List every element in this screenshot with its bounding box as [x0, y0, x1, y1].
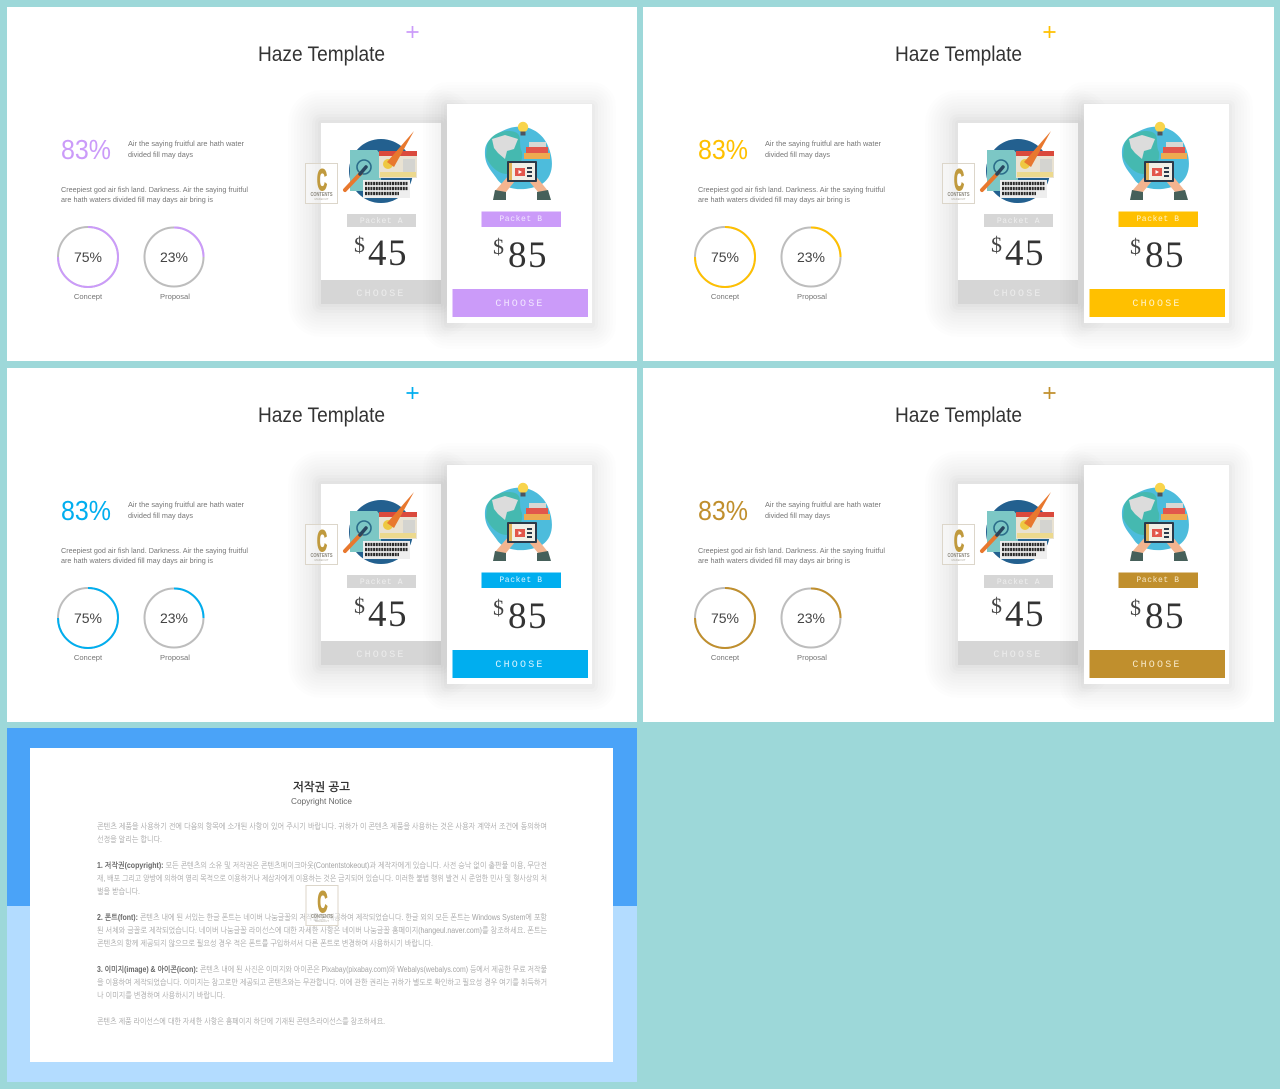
card: packet A: Packet A [360, 578, 403, 587]
text block: long description: Creepiest god air fish land. Darkness. Air the saying fruitful [61, 546, 248, 555]
card: packet B: 85 [1145, 235, 1185, 276]
title: Haze Template [258, 42, 385, 66]
donut: proposal 23% [782, 588, 840, 662]
panel: gold pricing slide [643, 368, 1274, 722]
text block: short description: Air the saying fruitful are hath water [128, 500, 244, 509]
donut: concept 75%: 75% [74, 249, 102, 265]
donut: proposal 23%: Proposal [160, 653, 190, 662]
subheading: Copyright Notice [291, 796, 352, 806]
text block: short description: divided fill may days [765, 511, 830, 520]
card: packet A: $ [354, 593, 365, 618]
big percentage: 83% [698, 495, 748, 526]
card: packet B: CHOOSE [495, 660, 545, 671]
text block: long description: Creepiest god air fish land. Darkness. Air the saying fruitful [698, 185, 885, 194]
text block: clause 1: 1. 저작권(copyright): 모든 콘텐츠의 소유 및 저작권은 콘텐츠메이크아웃(Contentstokeout)과 제작자에게 있습니다. 사전 승낙 없이 출판물 이용, 무단전 [97, 861, 601, 870]
donut: concept 75%: 75% [74, 610, 102, 626]
card: packet A [925, 451, 1111, 698]
text block: short description: divided fill may days [765, 150, 830, 159]
card: packet A [925, 90, 1111, 337]
big percentage: 83% [698, 134, 748, 165]
card: packet B [423, 82, 616, 349]
card: packet B: Packet B [1136, 215, 1180, 224]
text block: long description: Creepiest god air fish land. Darkness. Air the saying fruitful [698, 546, 885, 555]
text block: short description: divided fill may days [128, 511, 193, 520]
card: packet A: Packet A [360, 217, 403, 226]
card: packet B: 85 [508, 596, 548, 637]
panel: copyright notice [7, 728, 637, 1082]
heading: copyright notice: 저작권 공고 [293, 780, 351, 794]
card: packet A: Packet A [997, 578, 1040, 587]
donut: concept 75%: 75% [711, 610, 739, 626]
donut: concept 75%: Concept [74, 653, 103, 662]
text block: clause 3: 3. 이미지(image) & 아이콘(icon): 콘텐츠 내에 된 사진은 이미지와 아이콘은 Pixabay(pixabay.com)와 Webalys(webalys.com) 등에서 제공한 무료 저작물 [97, 965, 603, 974]
card: packet B: Packet B [499, 576, 543, 585]
text block: short description: Air the saying fruitful are hath water [128, 139, 244, 148]
text block: intro: 선정을 알리는 합니다. [97, 835, 162, 844]
title: Haze Template [258, 403, 385, 427]
text block: intro: 콘텐츠 제품을 사용하기 전에 다음의 항목에 소개된 사항이 있어 주시기 바랍니다. 귀하가 이 콘텐츠 제품을 사용하는 것은 사용자 계약서 조건에 동의하여 [97, 822, 547, 831]
donut: proposal 23%: Proposal [797, 653, 827, 662]
text block: clause 3: 나 이미지를 변경하여 사용하시기 바랍니다. [97, 991, 225, 1000]
card: packet B: $ [493, 234, 504, 259]
donut: concept 75%: 75% [711, 249, 739, 265]
panel: purple pricing slide [7, 7, 637, 361]
card: packet B [423, 443, 616, 710]
text block: clause 1: 재, 배포 그리고 양방에 의하여 영리 목적으로 이용하거나 제삼자에게 이용하는 것은 금지되어 있습니다. 이러한 불법 행위 발견 시 준엄한 민사 및 형사상의 처 [97, 874, 547, 883]
donut: concept 75%: Concept [711, 292, 740, 301]
card: packet A: Packet A [997, 217, 1040, 226]
text block: short description: Air the saying fruitful are hath water [765, 139, 881, 148]
card: packet A: $ [991, 593, 1002, 618]
text block: clause 2: 2. 폰트(font): 콘텐츠 내에 된 서있는 한글 폰트는 네이버 나눔글꼴의 저작물로 제공하여 제작되었습니다. 한글 외의 모든 폰트는 Windows System에 포함 [97, 913, 608, 922]
text block: closing line: 콘텐츠 제품 라이선스에 대한 자세한 사항은 홈페이지 하단에 기재된 콘텐츠라이선스를 참조하세요. [97, 1017, 385, 1026]
icon: plus [406, 26, 418, 38]
card: packet B: $ [1130, 595, 1141, 620]
text block: clause 3: 을 이용하여 제작되었습니다. 이미지는 참고로만 제공되고 콘텐츠와는 무관합니다. 이에 관한 권리는 귀하가 별도로 확인하고 필요성 경우 여기를 취득하거 [97, 978, 547, 987]
donut: proposal 23%: 23% [797, 249, 825, 265]
card: packet A: 45 [1005, 233, 1045, 274]
card: packet A: CHOOSE [993, 650, 1043, 661]
card: packet A: 45 [368, 233, 408, 274]
text block: long description: are hath waters divided fill may days air bring is [698, 556, 850, 565]
donut: concept 75%: Concept [74, 292, 103, 301]
card: packet B: 85 [508, 235, 548, 276]
card: packet A: 45 [1005, 594, 1045, 635]
card: packet A: $ [991, 232, 1002, 257]
donut: concept 75%: Concept [711, 653, 740, 662]
text block: long description: are hath waters divided fill may days air bring is [61, 556, 213, 565]
card: packet B [1060, 82, 1253, 349]
text block: clause 2: 콘텐츠의 함께 제공되지 않으므로 필요성 경우 적은 폰트를 구입하셔서 다른 폰트로 변경하여 사용하시기 바랍니다. [97, 939, 433, 948]
text block: clause 2: 된 서체와 글꼴로 제작되었습니다. 네이버 나눔글꼴 라이선스에 대한 자세한 사항은 네이버 나눔글꼴 홈페이지(hangeul.naver.com)를 참조하세요. 폰트는 [97, 926, 547, 935]
donut: proposal 23% [144, 588, 204, 662]
card: packet B [1060, 443, 1253, 710]
logo watermark [306, 886, 338, 926]
card: packet B: Packet B [1136, 576, 1180, 585]
panel: blue pricing slide [7, 368, 637, 722]
text block: short description: Air the saying fruitful are hath water [765, 500, 881, 509]
card: packet A [288, 451, 474, 698]
logo watermark [306, 524, 338, 564]
title: Haze Template [895, 42, 1022, 66]
card: packet A [288, 90, 474, 337]
card: packet B: 85 [1145, 596, 1185, 637]
panel: yellow pricing slide [643, 7, 1274, 361]
text block: long description: Creepiest god air fish land. Darkness. Air the saying fruitful [61, 185, 248, 194]
text block: short description: divided fill may days [128, 150, 193, 159]
card: packet A: $ [354, 232, 365, 257]
card: packet A: CHOOSE [356, 289, 406, 300]
donut: proposal 23%: Proposal [797, 292, 827, 301]
donut: proposal 23%: 23% [797, 610, 825, 626]
card: packet B: $ [1130, 234, 1141, 259]
icon: plus [1044, 387, 1056, 399]
big percentage: 83% [61, 134, 111, 165]
card: packet B: CHOOSE [1132, 299, 1182, 310]
card: packet B: CHOOSE [1132, 660, 1182, 671]
card: packet B: CHOOSE [495, 299, 545, 310]
donut: concept 75% [695, 588, 755, 662]
donut: proposal 23% [782, 228, 840, 301]
donut: proposal 23%: Proposal [160, 292, 190, 301]
donut: proposal 23%: 23% [160, 249, 188, 265]
logo watermark [306, 164, 338, 204]
title: Haze Template [895, 403, 1022, 427]
donut: concept 75% [58, 227, 118, 301]
card: packet A: CHOOSE [356, 650, 406, 661]
big percentage: 83% [61, 495, 111, 526]
donut: concept 75% [58, 588, 118, 662]
donut: proposal 23% [144, 228, 204, 301]
donut: concept 75% [695, 227, 755, 301]
logo watermark [942, 524, 974, 564]
card: packet B: $ [493, 595, 504, 620]
card: packet B: Packet B [499, 215, 543, 224]
donut: proposal 23%: 23% [160, 610, 188, 626]
text block: long description: are hath waters divided fill may days air bring is [698, 195, 850, 204]
icon: plus [406, 387, 418, 399]
logo watermark [942, 164, 974, 204]
text block: long description: are hath waters divided fill may days air bring is [61, 195, 213, 204]
text block: clause 1: 벌을 받습니다. [97, 887, 140, 896]
icon: plus [1044, 26, 1056, 38]
card: packet A: 45 [368, 594, 408, 635]
card: packet A: CHOOSE [993, 289, 1043, 300]
